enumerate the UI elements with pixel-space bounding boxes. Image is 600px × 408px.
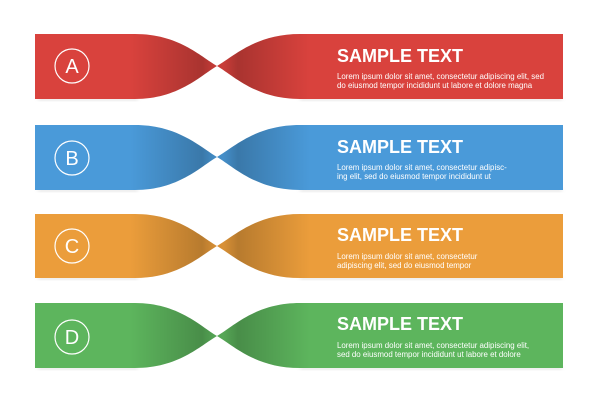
icon: circle A [55,49,89,83]
heading C: SAMPLE TEXT [337,225,463,245]
heading A: SAMPLE TEXT [337,46,463,66]
ribbon B [35,125,563,192]
body D: sed do eiusmod tempor incididunt ut labore et dolore [337,350,521,359]
heading B: SAMPLE TEXT [337,137,463,157]
icon: circle C: C [65,236,79,258]
ribbon A [35,34,563,101]
icon: circle B [55,141,89,175]
body B: ing elit, sed do eiusmod tempor incididunt ut [337,172,492,181]
icon: circle B: B [65,148,79,170]
ribbon C [35,214,563,280]
heading D: SAMPLE TEXT [337,314,463,334]
icon: circle C [55,229,89,263]
body A: Lorem ipsum dolor sit amet, consectetur adipiscing elit, sed [337,72,544,81]
ribbon D [35,303,563,370]
icon: circle A: A [65,56,79,78]
body A: do eiusmod tempor incididunt ut labore et dolore magna [337,81,533,90]
body B: Lorem ipsum dolor sit amet, consectetur adipisc- [337,163,507,172]
body D: Lorem ipsum dolor sit amet, consectetur adipiscing elit, [337,341,529,350]
icon: circle D: D [65,327,79,349]
body C: Lorem ipsum dolor sit amet, consectetur [337,252,478,261]
icon: circle D [55,320,89,354]
body C: adipiscing elit, sed do eiusmod tempor [337,261,472,270]
